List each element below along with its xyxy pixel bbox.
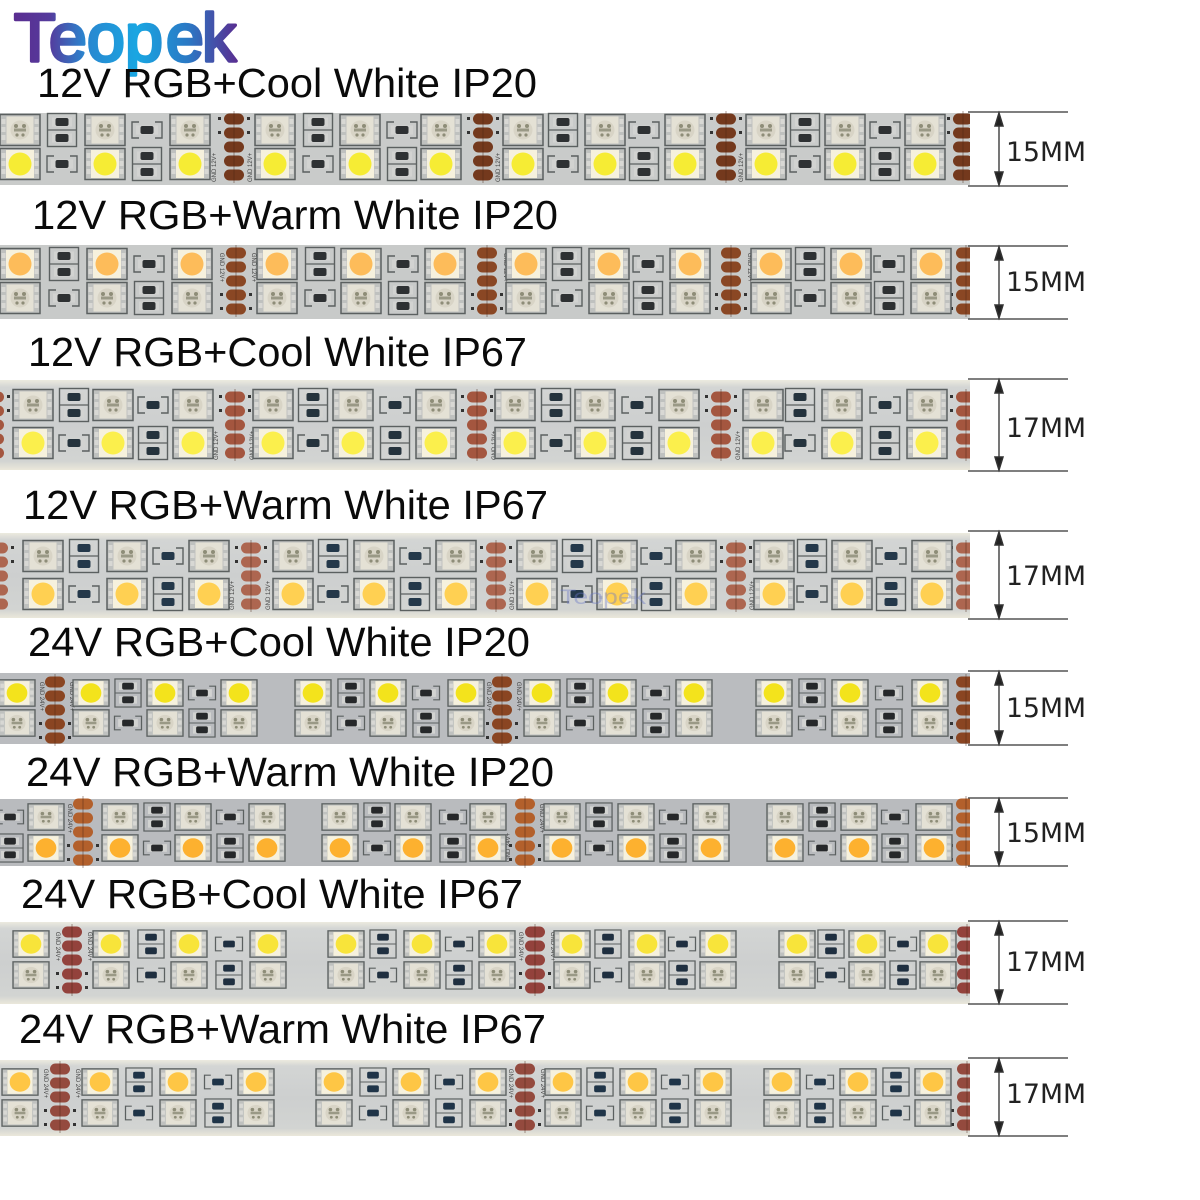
strip band — [0, 113, 970, 185]
strip 5: 24V RGB + Cool White IP20 — [0, 673, 982, 746]
strip band with silicone edge — [0, 380, 970, 470]
solder pads: GND 12V+ — [739, 152, 745, 182]
top row cool white LEDs — [0, 680, 948, 706]
solder pads: GND 12V+ — [746, 253, 752, 282]
watermark: Teopek — [560, 586, 647, 609]
resistors — [47, 114, 900, 180]
strip band with silicone edge — [0, 922, 970, 1004]
solder pads: GND 24V+ — [506, 832, 512, 862]
resistors — [59, 388, 900, 460]
title 3: 12V RGB+Cool White IP67 — [28, 329, 527, 375]
strip band with silicone edge — [0, 533, 970, 618]
dimension 4: 17MM — [968, 531, 1086, 619]
solder pads: GND 24V+ — [74, 1069, 80, 1098]
solder pads: GND 12V+ — [214, 430, 220, 460]
title 6: 24V RGB+Warm White IP20 — [26, 749, 554, 795]
dimension 3: 17MM — [968, 379, 1086, 471]
bottom row warm white LEDs — [23, 578, 952, 610]
solder pads: GND 12V+ — [736, 430, 742, 460]
solder pads — [38, 674, 982, 746]
solder pads: GND 24V+ — [38, 682, 44, 711]
dimension 3: 17MM: 17MM — [1006, 413, 1086, 444]
logo: Teopek: Teopek — [14, 0, 237, 76]
top row RGB LEDs — [13, 390, 947, 420]
dimension 5: 15MM — [968, 671, 1086, 745]
solder pads: GND 24V+ — [66, 804, 72, 833]
solder pads: GND 12V+ — [212, 152, 218, 182]
title 2: 12V RGB+Warm White IP20 — [32, 192, 558, 238]
bottom row cool white LEDs — [13, 428, 947, 458]
top row RGB LEDs — [28, 804, 952, 830]
solder pads: GND 12V+ — [492, 430, 498, 460]
solder pads: GND 24V+ — [515, 682, 521, 711]
solder pads: GND 24V+ — [86, 932, 92, 961]
solder pads: GND 12V+ — [230, 580, 236, 610]
solder pads — [66, 796, 982, 868]
dimension 8: 17MM: 17MM — [1006, 1079, 1086, 1110]
dimension 5: 15MM: 15MM — [1006, 693, 1086, 724]
strip 3: 12V RGB + Cool White IP67 — [0, 380, 982, 470]
solder pads: GND 12V+ — [502, 253, 508, 282]
strip band with silicone edge — [0, 1060, 970, 1136]
dimension 4: 17MM: 17MM — [1006, 561, 1086, 592]
bottom row cool white LEDs — [0, 148, 945, 180]
title 5: 24V RGB+Cool White IP20 — [28, 619, 530, 665]
dimension 8: 17MM — [968, 1058, 1086, 1136]
solder pads: GND 12V+ — [250, 430, 256, 460]
top row warm white LEDs — [2, 1069, 951, 1095]
strip 1: 12V RGB + Cool White IP20 — [0, 111, 979, 185]
bottom row RGB LEDs — [0, 710, 948, 736]
resistors — [49, 248, 904, 314]
top row RGB LEDs — [0, 114, 945, 146]
strip band — [0, 799, 970, 866]
solder pads: GND 24V+ — [42, 1069, 48, 1098]
bottom row RGB LEDs — [2, 1100, 951, 1126]
solder pads: GND 24V+ — [54, 932, 60, 961]
solder pads: GND 24V+ — [507, 1069, 513, 1098]
solder pads: GND 12V+ — [750, 580, 756, 610]
solder pads: GND 12V+ — [496, 152, 502, 182]
solder pads — [0, 389, 982, 461]
solder pads: GND 12V+ — [250, 253, 256, 282]
strip 6: 24V RGB + Warm White IP20 — [0, 796, 982, 868]
dimension 1: 15MM: 15MM — [1006, 137, 1086, 168]
dimension 6: 15MM: 15MM — [1006, 818, 1086, 849]
solder pads: GND 12V+ — [266, 580, 272, 610]
strip 2: 12V RGB + Warm White IP20 — [0, 245, 982, 319]
bottom row warm white LEDs — [28, 835, 952, 861]
resistors — [114, 679, 902, 737]
strip band — [0, 245, 970, 319]
solder pads — [0, 540, 982, 612]
title 7: 24V RGB+Cool White IP67 — [21, 871, 523, 917]
solder pads — [218, 245, 982, 317]
solder pads — [54, 924, 983, 996]
resistors — [0, 803, 908, 862]
solder pads: GND 12V+ — [218, 253, 224, 282]
bottom row RGB LEDs — [13, 962, 956, 988]
top row RGB LEDs — [23, 540, 952, 572]
strip 4: 12V RGB + Warm White IP67 — [0, 533, 982, 618]
solder pads: GND 24V+ — [517, 932, 523, 961]
solder pads: GND 24V+ — [538, 804, 544, 833]
solder pads: GND 12V+ — [510, 580, 516, 610]
dimension 2: 15MM — [968, 246, 1086, 319]
strip 7: 24V RGB + Cool White IP67 — [0, 922, 983, 1004]
dimension 1: 15MM — [968, 112, 1086, 186]
title 4: 12V RGB+Warm White IP67 — [23, 482, 548, 528]
solder pads: GND 24V+ — [539, 1069, 545, 1098]
top row cool white LEDs — [13, 931, 956, 957]
bottom row RGB LEDs — [0, 282, 951, 314]
resistors — [69, 540, 906, 610]
solder pads: GND 24V+ — [485, 682, 491, 711]
title 8: 24V RGB+Warm White IP67 — [19, 1006, 546, 1052]
strip 8: 24V RGB + Warm White IP67 — [0, 1060, 983, 1136]
solder pads: GND 12V+ — [248, 152, 254, 182]
strip band — [0, 673, 970, 744]
dimension 2: 15MM: 15MM — [1006, 267, 1086, 298]
title 1: 12V RGB+Cool White IP20 — [37, 60, 537, 106]
dimension 7: 17MM: 17MM — [1006, 947, 1086, 978]
dimension 6: 15MM — [968, 798, 1086, 866]
solder pads: GND 24V+ — [68, 682, 74, 711]
solder pads — [212, 111, 979, 183]
dimension 7: 17MM — [968, 921, 1086, 1004]
top row warm white LEDs — [0, 248, 951, 280]
solder pads — [42, 1061, 983, 1133]
resistors — [126, 1068, 910, 1127]
solder pads: GND 24V+ — [549, 932, 555, 961]
resistors — [138, 930, 916, 989]
